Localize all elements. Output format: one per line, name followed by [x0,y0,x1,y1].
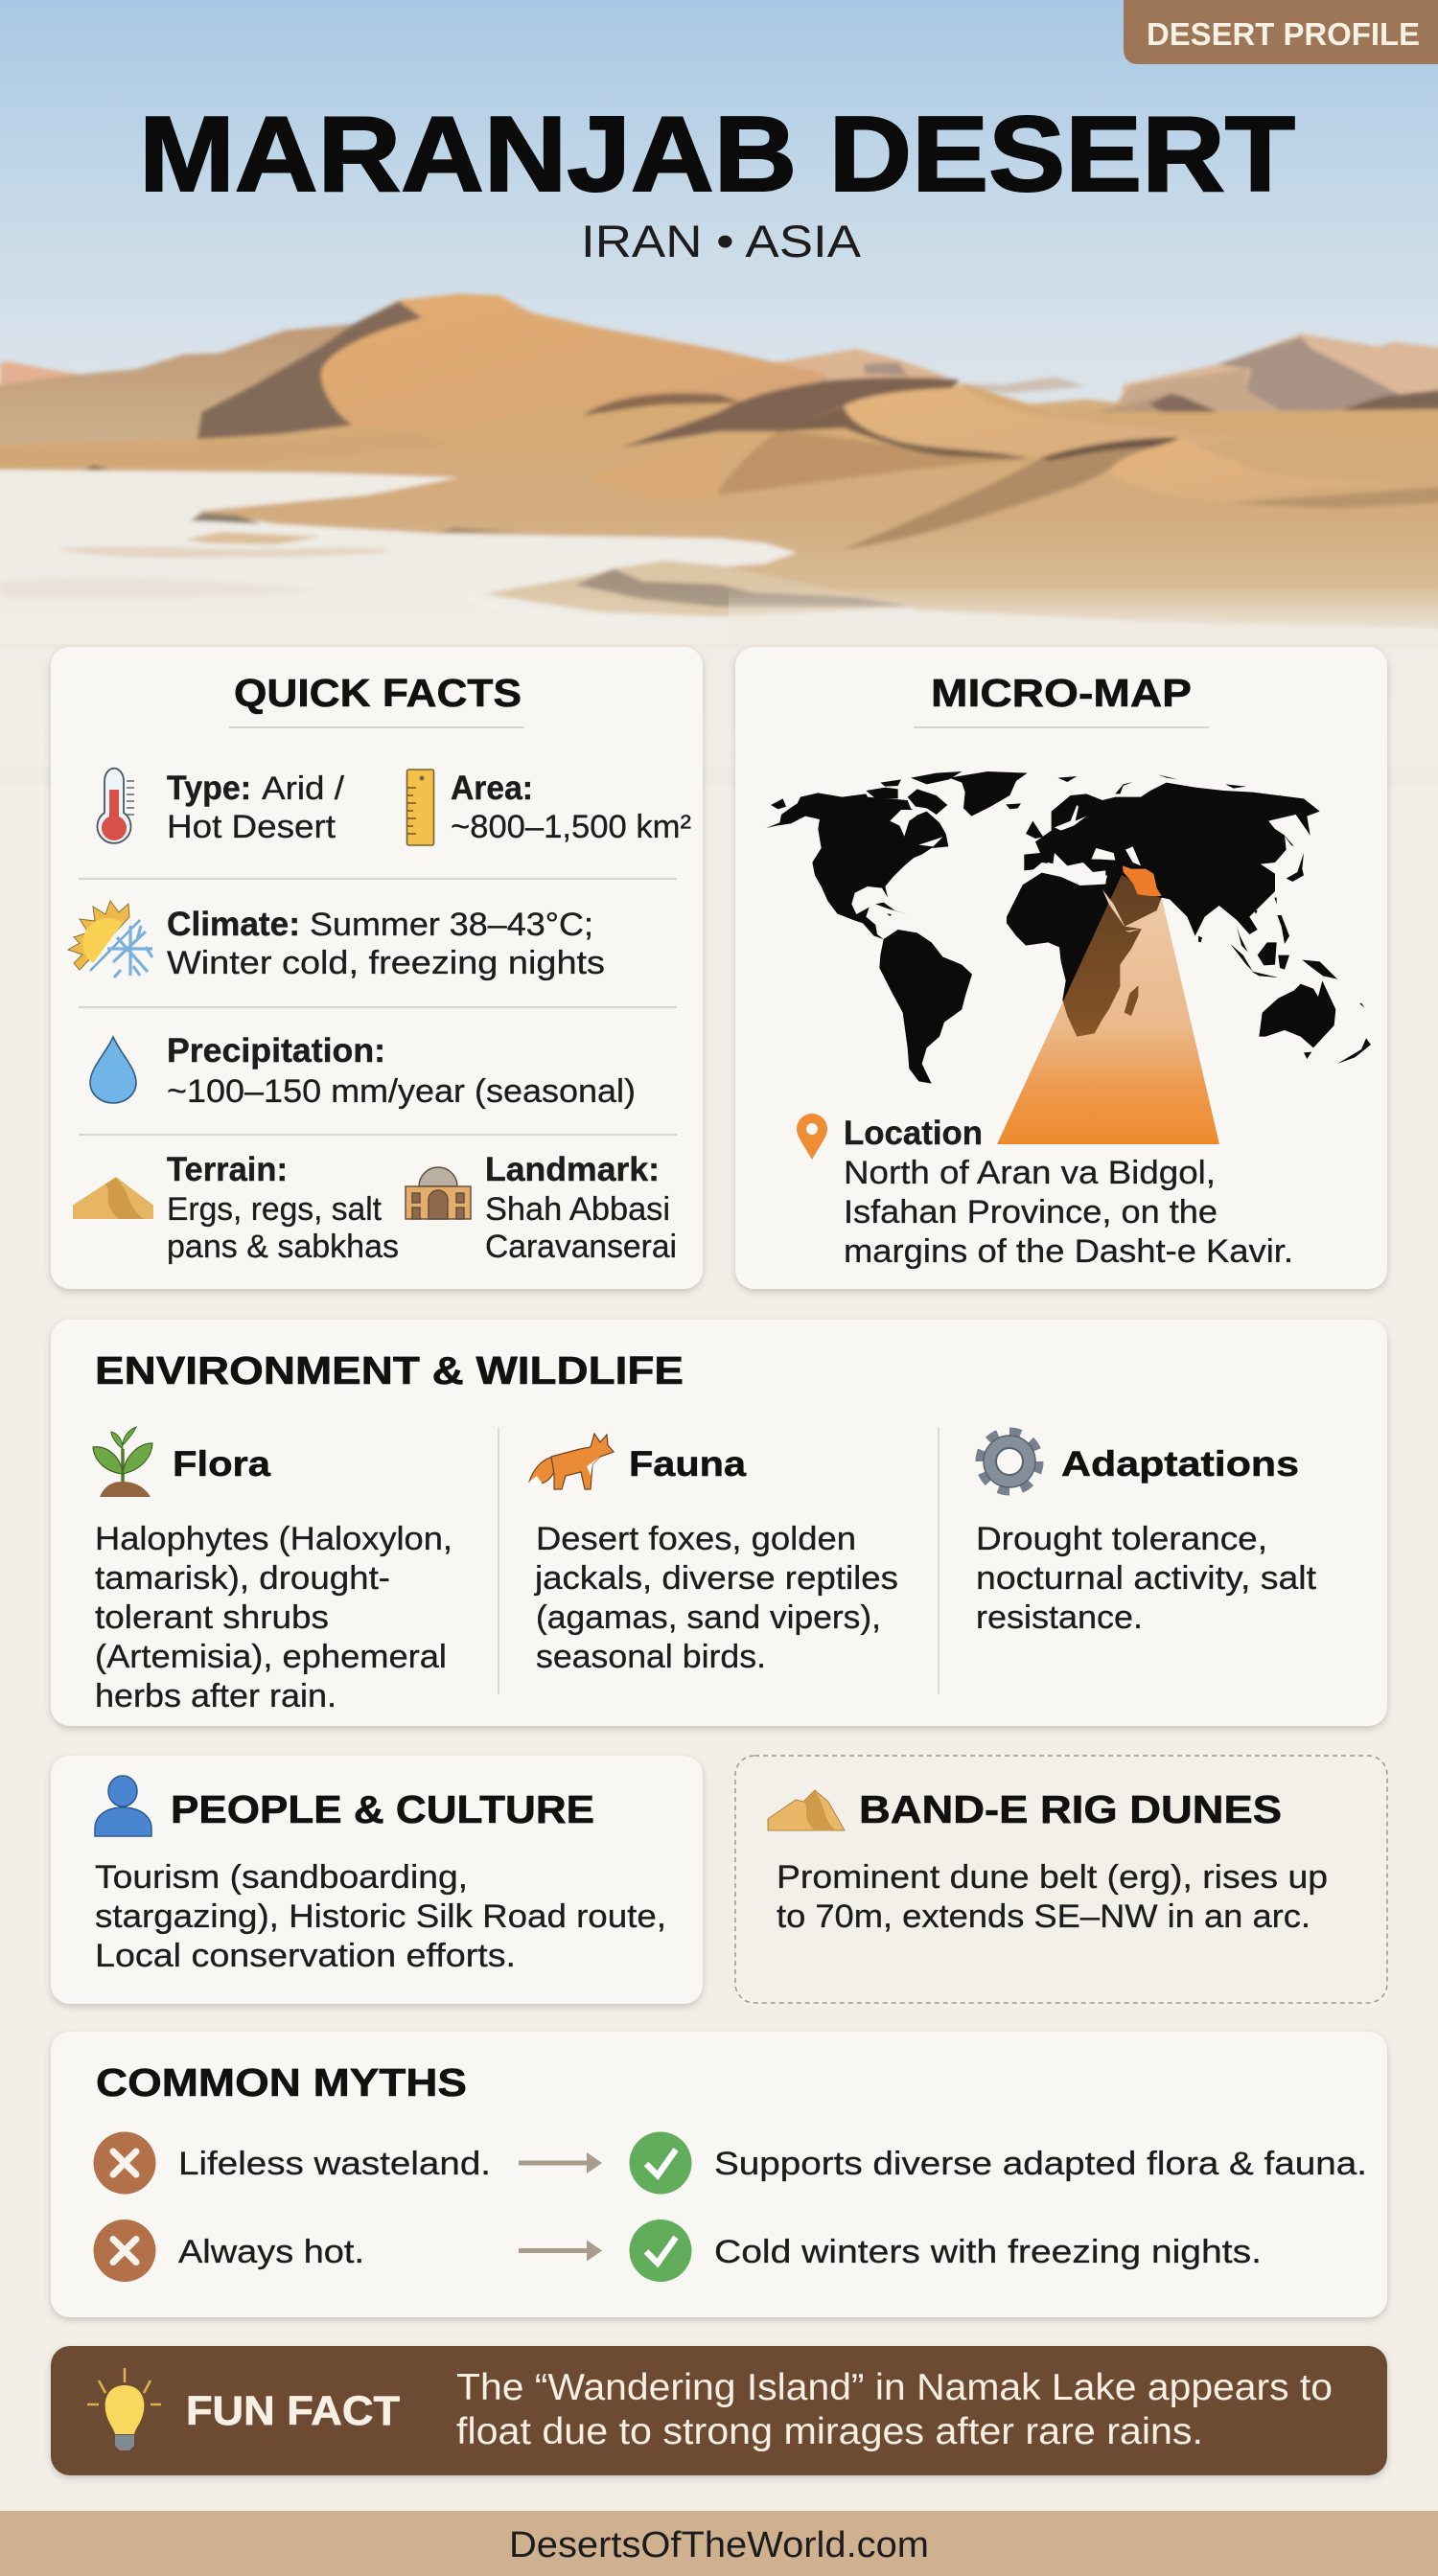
fact: area: ~800–1,500 km² [451,809,691,845]
panel: environment and wildlife [51,1320,1387,1726]
fauna text: (agamas, sand vipers), [536,1599,881,1636]
fact: precipitation: Precipitation: [167,1032,385,1070]
myth text: Lifeless wasteland. [178,2146,491,2182]
flora text: herbs after rain. [95,1678,336,1714]
fact: type [167,770,345,845]
icon: plant [93,1427,152,1497]
location text: Location [844,1115,983,1152]
icon: fox [529,1434,614,1489]
band-e rig text [777,1859,1328,1935]
panel: band-e rig dunes [735,1756,1387,2003]
band-e rig text: to 70m, extends SE–NW in an arc. [777,1898,1310,1935]
fact: climate: Winter cold, freezing nights [167,945,605,981]
heading: people and culture: PEOPLE & CULTURE [171,1787,594,1831]
subheading: adaptations: Adaptations [1061,1444,1299,1484]
heading: common myths: COMMON MYTHS [96,2060,467,2104]
arrow [519,2241,602,2262]
icon: water drop [90,1037,136,1103]
adaptations text: nocturnal activity, salt [976,1560,1317,1597]
myth text: Always hot. [178,2234,364,2270]
panel: common myths [51,2032,1387,2317]
fact: landmark [485,1151,677,1265]
subheading: fauna: Fauna [629,1444,746,1484]
panel: quick facts [51,647,703,1289]
fact: area [451,770,691,845]
heading: environment and wildlife: ENVIRONMENT & WILDLIFE [95,1348,684,1392]
location text: North of Aran va Bidgol, [844,1155,1216,1191]
myth row 1 [94,2131,1367,2195]
people text: Local conservation efforts. [95,1938,516,1974]
panel: fun fact [51,2346,1387,2475]
fact text: Cold winters with freezing nights. [714,2234,1262,2270]
panel: micro-map [735,647,1387,1289]
people text: Tourism (sandboarding, [95,1859,468,1896]
flora text: (Artemisia), ephemeral [95,1639,447,1675]
heading: quick facts: QUICK FACTS [234,671,522,715]
fact: precipitation: ~100–150 mm/year (seasonal) [167,1073,636,1110]
badge: desert profile [1124,0,1438,64]
heading: band-e rig dunes: BAND-E RIG DUNES [859,1787,1282,1831]
fact: terrain: pans & sabkhas [167,1229,399,1265]
icon: light bulb [87,2368,161,2450]
fauna text: Desert foxes, golden [536,1521,856,1557]
icon: check [629,2220,692,2282]
fact: type: Arid / [262,770,345,807]
flora text: Halophytes (Haloxylon, [95,1521,452,1557]
subtitle: IRAN • ASIA [581,216,862,266]
fact: type: Type: [167,770,251,807]
icon: cross [94,2131,155,2195]
adaptations text [976,1521,1317,1636]
world map: eurasia, africa, oceania [1007,774,1371,1064]
title: MARANJAB DESERT [139,95,1295,214]
icon: gear [980,1432,1039,1491]
icon: thermometer [98,769,134,843]
footer: DesertsOfTheWorld.com [509,2525,929,2565]
icon: dune [768,1790,845,1830]
label: fun fact: FUN FACT [186,2388,400,2434]
fun fact text: float due to strong mirages after rare rains. [456,2411,1203,2452]
fact: terrain: Terrain: [167,1151,288,1188]
fauna text: jackals, diverse reptiles [534,1560,898,1597]
fauna text [534,1521,898,1675]
icon: terrain dune [73,1177,153,1219]
fact: type: Hot Desert [167,809,336,845]
subheading: flora: Flora [173,1444,270,1484]
fact: landmark: Landmark: [485,1151,660,1188]
icon: person [95,1776,151,1836]
fact: landmark: Caravanserai [485,1229,677,1265]
icon: check [629,2131,692,2195]
icon: caravanserai landmark [406,1167,471,1219]
icon: sun and snowflake [68,901,152,978]
adaptations text: resistance. [976,1599,1143,1636]
fun fact text: The “Wandering Island” in Namak Lake appears to [456,2367,1333,2408]
adaptations text: Drought tolerance, [976,1521,1267,1557]
flora text: tolerant shrubs [95,1599,329,1636]
flora text: tamarisk), drought- [95,1560,390,1597]
fact: climate: Summer 38–43°C; [310,907,593,943]
location text [844,1115,1293,1270]
people text [95,1859,666,1974]
red sea and iran highlight [1102,865,1162,932]
hero desert landscape [0,0,1438,786]
footer [0,2511,1438,2576]
fact: climate [167,906,605,981]
location cone [997,875,1219,1144]
fauna text: seasonal birds. [536,1639,766,1675]
arrow [519,2152,602,2174]
location text: margins of the Dasht-e Kavir. [844,1233,1293,1270]
world map: americas [766,771,1028,1084]
fun fact text [456,2367,1333,2452]
people text: stargazing), Historic Silk Road route, [95,1898,666,1935]
badge: desert profile: DESERT PROFILE [1147,16,1420,52]
heading: micro-map: MICRO-MAP [931,671,1192,715]
icon: location pin [797,1114,827,1160]
band-e rig text: Prominent dune belt (erg), rises up [777,1859,1328,1896]
fact text: Supports diverse adapted flora & fauna. [714,2146,1367,2182]
fact: landmark: Shah Abbasi [485,1191,670,1228]
fact: precipitation [167,1032,636,1110]
icon: cross [94,2220,155,2282]
fact: area: Area: [451,770,533,807]
fact: terrain: Ergs, regs, salt [167,1191,383,1228]
fact: climate: Climate: [167,906,300,943]
location text: Isfahan Province, on the [844,1194,1218,1230]
myth row 2 [94,2220,1262,2282]
flora text [95,1521,452,1714]
icon: ruler [406,770,433,845]
panel: people and culture [51,1756,703,2004]
fact: terrain [167,1151,399,1265]
